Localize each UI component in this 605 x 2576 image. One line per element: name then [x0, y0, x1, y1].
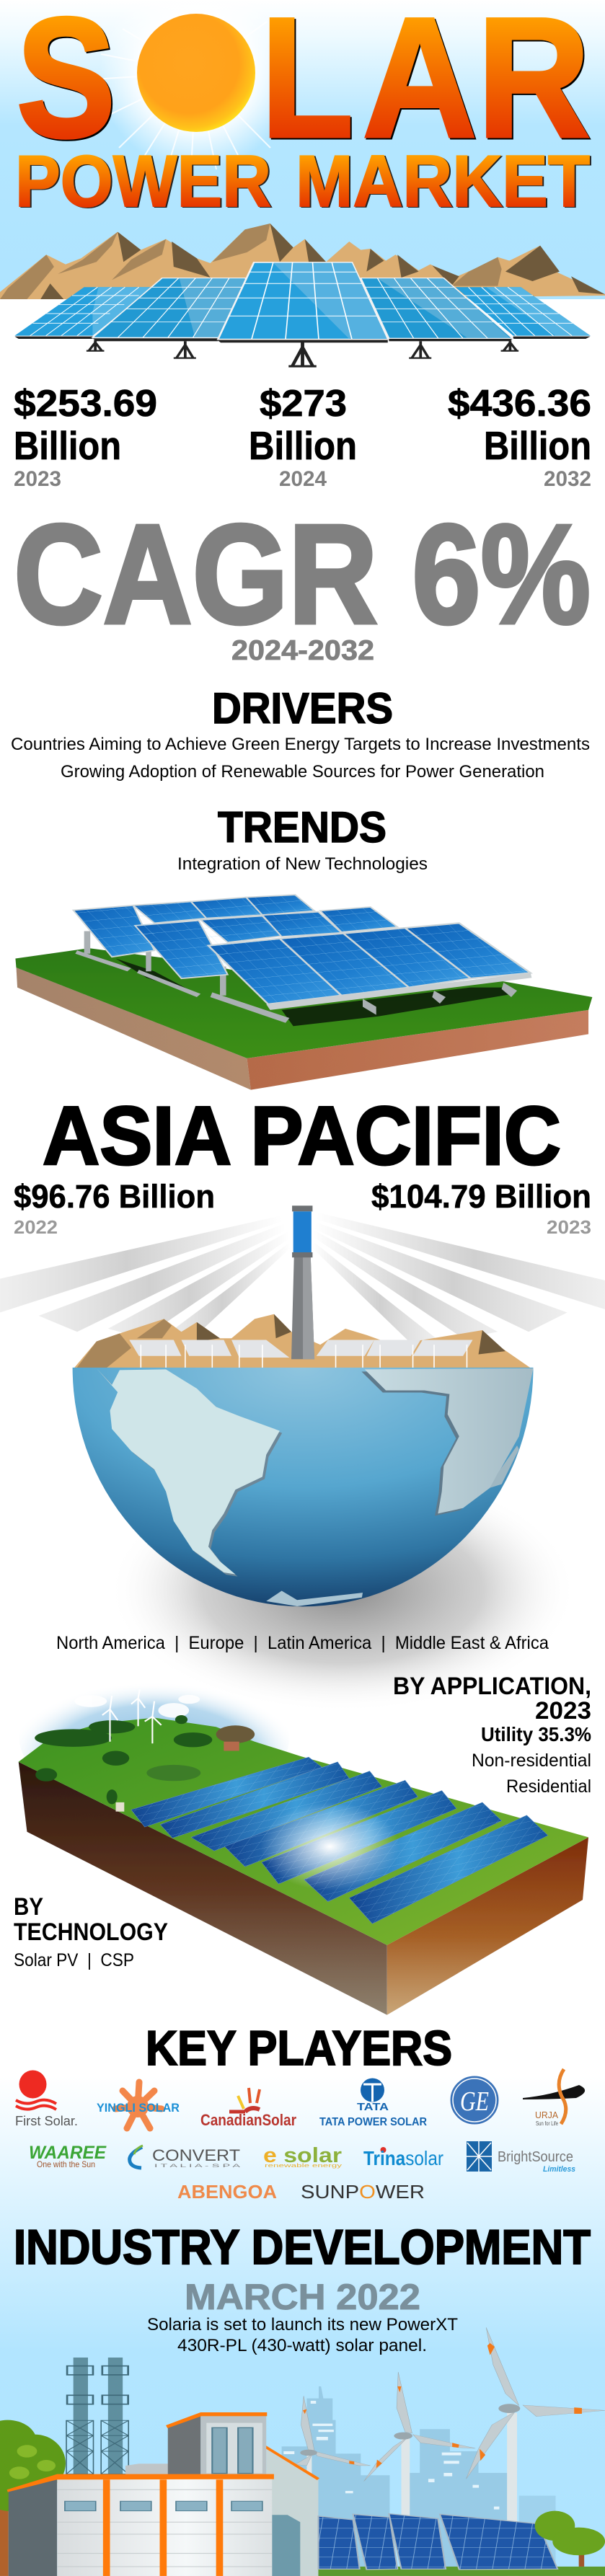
stat: 2032 market size	[448, 383, 591, 491]
text: other regions: North America | Europe | Latin America | Middle East & Africa	[56, 1633, 549, 1653]
icon: farmhouse	[116, 1742, 239, 1812]
map: Madagascar	[490, 1446, 519, 1488]
illustration: chimneys	[66, 2358, 128, 2475]
stat: Asia Pacific 2022: 2022	[14, 1216, 58, 1238]
section: by application: Residential	[506, 1776, 591, 1797]
illustration: solar panel array	[14, 262, 591, 366]
logo: Tata Power Solar	[319, 2078, 427, 2128]
section: trends: Integration of New Technologies	[177, 854, 428, 874]
icon: clouds	[74, 1676, 200, 1718]
logo: GE	[450, 2076, 499, 2125]
illustration: globe	[73, 1368, 534, 1606]
logo: Convert Italia: CONVERT	[152, 2146, 240, 2164]
section: by technology: BY	[14, 1893, 43, 1921]
panel: inner right	[361, 278, 513, 338]
illustration: factory	[7, 2412, 319, 2576]
stat: Asia Pacific 2023: 2023	[547, 1216, 591, 1238]
logo: Urja: Sun for Life	[536, 2120, 558, 2127]
logo: Canadian Solar	[200, 2088, 296, 2129]
shadow: globe	[108, 1467, 577, 1712]
logo: BrightSource: BrightSource	[498, 2149, 573, 2165]
illustration: solar farm island	[19, 1668, 588, 2015]
section: drivers: DRIVERS	[212, 684, 393, 732]
stat: 2024 market size: 2024	[279, 467, 327, 491]
stat: CAGR: 2024-2032	[231, 635, 374, 666]
panel group: back row	[74, 895, 314, 957]
logo: Tata Power Solar: TATA	[357, 2101, 389, 2113]
icon: wind turbines	[102, 1689, 162, 1743]
illustration: mountains	[0, 223, 605, 299]
stat: 2032 market size: Billion	[484, 423, 591, 468]
logo: Urja: URJA	[535, 2110, 558, 2120]
logo: eSolar: e solar	[263, 2144, 342, 2167]
logo: First Solar: First Solar.	[15, 2114, 78, 2128]
logo: BrightSource: Limitless	[543, 2165, 575, 2174]
illustration: light beams	[0, 1213, 605, 1342]
logo: Trina Solar: Trinasolar	[363, 2147, 443, 2169]
section: by application: 2023	[535, 1697, 591, 1725]
logo: Tata Power Solar: TATA POWER SOLAR	[319, 2116, 427, 2128]
panel: far right	[455, 287, 591, 336]
map: Africa	[361, 1368, 534, 1515]
section: by application: Utility 35.3%	[481, 1723, 591, 1745]
title: solar	[17, 0, 590, 173]
text: development description: Solaria is set to launch its new PowerXT	[147, 2315, 458, 2334]
illustration: right trees	[535, 2511, 605, 2567]
stat: 2023 market size: Billion	[14, 423, 121, 468]
logo: Convert Italia	[130, 2146, 240, 2169]
logo: GE: GE	[460, 2086, 489, 2117]
icon: panel supports	[75, 931, 517, 1023]
illustration: wind turbines	[295, 2327, 605, 2523]
stat: 2024 market size: Billion	[249, 423, 357, 468]
panel group: front row	[208, 923, 531, 1004]
illustration: city skyline	[282, 2386, 556, 2576]
illustration: mountains on globe	[73, 1314, 534, 1370]
logo: Yingli Solar	[97, 2082, 180, 2128]
panel rows	[131, 1757, 548, 1924]
heading: Asia Pacific: ASIA PACIFIC	[43, 1090, 561, 1182]
illustration: solar panels	[318, 2514, 557, 2570]
heading: key players: KEY PLAYERS	[146, 2021, 452, 2076]
section: by application: BY APPLICATION,	[393, 1673, 591, 1700]
stat: 2032 market size: 2032	[544, 467, 591, 491]
section: drivers	[11, 684, 590, 782]
illustration: city, wind and factory scene	[0, 2327, 605, 2576]
panel: far left	[14, 287, 152, 336]
illustration: solar panels on grass island	[15, 895, 592, 1090]
logo: Convert Italia: I T A L I A - S P A	[154, 2164, 240, 2169]
panel: inner left	[92, 278, 246, 337]
logo: Urja	[523, 2069, 585, 2127]
panel: centre	[218, 262, 388, 340]
section: by technology: TECHNOLOGY	[14, 1918, 168, 1946]
illustration: ground	[318, 2567, 605, 2576]
panel cell grid overlay	[74, 895, 531, 1004]
stat: 2023 market size	[14, 383, 157, 491]
logo: Canadian Solar: CanadianSolar	[200, 2111, 296, 2129]
map: Antarctica	[266, 1591, 363, 1606]
icon: sun	[94, 0, 293, 173]
icon: solar tower	[291, 1205, 314, 1359]
logo: eSolar: renewable energy	[265, 2164, 343, 2169]
logo: BrightSource	[467, 2141, 575, 2174]
icon: panel stands	[87, 340, 518, 366]
logo: First Solar	[15, 2071, 78, 2128]
section: by technology	[14, 1893, 168, 1970]
section: by technology: Solar PV | CSP	[14, 1950, 134, 1970]
text: development description: 430R-PL (430-watt) solar panel.	[177, 2336, 427, 2355]
panel cell grid overlay	[131, 1757, 548, 1924]
section: by application	[393, 1673, 591, 1797]
stat: 2024 market size: $273	[260, 383, 347, 425]
section: drivers: Countries Aiming to Achieve Green Energy Targets to Increase Investments	[11, 735, 590, 754]
title: power market: MARKET	[296, 141, 590, 222]
logo: Waaree: WAAREE	[29, 2143, 107, 2163]
stat: Asia Pacific 2023	[371, 1178, 591, 1238]
stat: Asia Pacific 2023: $104.79 Billion	[371, 1178, 591, 1215]
stat: 2023 market size: 2023	[14, 467, 61, 491]
stat: 2024 market size	[249, 383, 357, 491]
map: South America	[97, 1368, 282, 1577]
logo: Abengoa: ABENGOA	[177, 2181, 277, 2203]
section: by application: Non-residential	[472, 1750, 591, 1771]
logo: SunPower: SUNP OWER	[301, 2181, 425, 2203]
title: power market: POWER	[15, 141, 271, 222]
stat: 2023 market size: $253.69	[14, 383, 157, 425]
section: trends	[177, 803, 428, 874]
text: March 2022: MARCH 2022	[185, 2277, 420, 2317]
stat: 2032 market size: $436.36	[448, 383, 591, 425]
icon: forest	[35, 1715, 255, 1804]
illustration: tree	[0, 2420, 66, 2576]
stat: Asia Pacific 2022: $96.76 Billion	[14, 1178, 215, 1215]
title: power market	[15, 141, 590, 222]
section: drivers: Growing Adoption of Renewable Sources for Power Generation	[61, 762, 544, 782]
panel group: middle row	[135, 907, 397, 978]
stat: Asia Pacific 2022	[14, 1178, 215, 1238]
logo: Yingli Solar: YINGLI SOLAR	[97, 2101, 180, 2115]
text: development description	[147, 2315, 458, 2355]
illustration: heliostat mirrors	[129, 1340, 472, 1370]
logo: Waaree: One with the Sun	[37, 2159, 95, 2169]
section: trends: TRENDS	[218, 803, 387, 851]
